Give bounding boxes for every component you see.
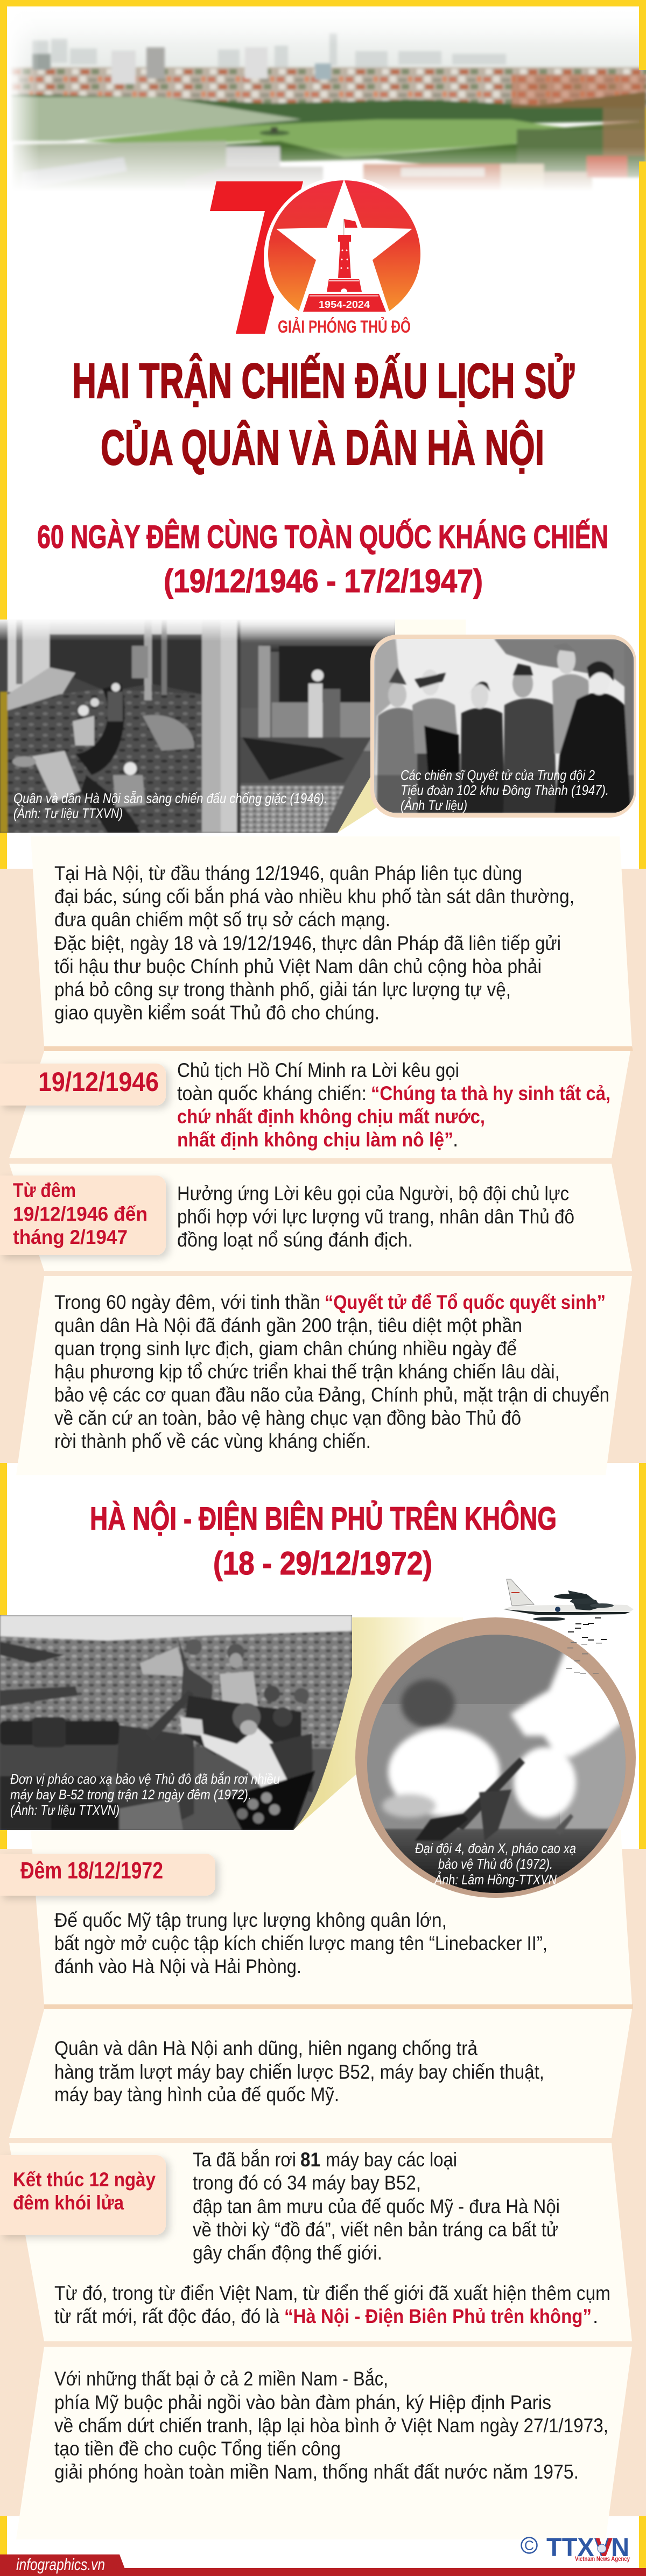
card: background of the battle: Tại Hà Nội, từ đầu tháng 12/1946, quân Pháp liên tục dùng <box>54 862 522 884</box>
label: from night 19/12/1946: 19/12/1946 đến <box>13 1203 148 1225</box>
card: background of the battle: đại bác, súng cối bắn phá vào nhiều khu phố tàn sát dân thường, <box>54 885 574 907</box>
card: response to the appeal <box>9 1164 632 1271</box>
label: end of 12 days and nights: Kết thúc 12 ngày <box>13 2169 156 2191</box>
card: background of the battle: đưa quân chiếm một số trụ sở cách mạng. <box>54 909 390 931</box>
footer: infographics.vn tag: infographics.vn <box>16 2555 105 2574</box>
logo star <box>276 179 412 311</box>
caption: portrait photo: Tiểu đoàn 102 khu Đông Thành (1947). <box>401 782 609 798</box>
card: resistance: hàng trăm lượt máy bay chiến lược B52, máy bay chiến thuật, <box>54 2061 544 2083</box>
section heading: Hanoi - Dien Bien Phu in the air <box>90 1501 557 1581</box>
card: end of 12 days: đập tan âm mưu của đế quốc Mỹ - đưa Hà Nội <box>193 2195 560 2218</box>
card: night of 18/12/1972: Đế quốc Mỹ tập trung lực lượng không quân lớn, <box>54 1909 447 1931</box>
label: 19/12/1946: 19/12/1946 <box>38 1067 159 1097</box>
caption: round photo: Đại đội 4, đoàn X, pháo cao xạ <box>415 1840 576 1856</box>
label: end of 12 days and nights: đêm khói lửa <box>13 2192 124 2214</box>
label: night of 18/12/1972: Đêm 18/12/1972 <box>20 1857 163 1884</box>
card: end of 12 days: từ rất mới, rất độc đáo, đó là <box>54 2305 279 2327</box>
card: Paris agreement <box>16 2347 632 2539</box>
card: resistance <box>9 2009 632 2138</box>
card: 60 days summary: quân dân Hà Nội đã đánh gần 200 trận, tiêu diệt một phần <box>54 1314 522 1336</box>
card: background of the battle: phá bỏ công sự trong thành phố, giải tán lực lượng tự vệ, <box>54 979 511 1001</box>
card: 19/12/1946 appeal: Chủ tịch Hồ Chí Minh ra Lời kêu gọi <box>177 1059 459 1081</box>
card: end of 12 days: trong đó có 34 máy bay B52, <box>193 2172 421 2194</box>
caption: portrait photo <box>401 767 609 813</box>
card: 60 days summary: về căn cứ an toàn, bảo vệ hàng chục vạn đồng bào Thủ đô <box>54 1407 521 1429</box>
card: resistance: Quân và dân Hà Nội anh dũng, hiên ngang chống trả <box>54 2037 478 2059</box>
card: 19/12/1946 appeal: “Chúng ta thà hy sinh tất cả, <box>371 1082 610 1104</box>
card: end of 12 days: máy bay các loại <box>326 2149 457 2171</box>
logo circle <box>268 180 420 311</box>
card: end of 12 days: gây chấn động thế giới. <box>193 2242 382 2264</box>
logo: 70 years liberation of the capital <box>210 177 425 338</box>
card: Paris agreement: tạo tiền đề cho cuộc Tổng tiến công <box>54 2438 341 2460</box>
caption: anti-aircraft photo: Đơn vị pháo cao xạ bảo vệ Thủ đô đã bắn rơi nhiều <box>10 1771 280 1787</box>
pale yellow accent behind 1972 photos <box>293 1617 463 1830</box>
section heading: 60 days and nights: (19/12/1946 - 17/2/1947) <box>164 563 483 599</box>
main title <box>72 353 574 475</box>
card: Paris agreement: giải phóng hoàn toàn miền Nam, thống nhất đất nước năm 1975. <box>54 2461 579 2483</box>
caption: portrait photo: (Ảnh Tư liệu) <box>401 797 467 813</box>
caption: round photo: Ảnh: Lâm Hồng-TTXVN <box>433 1871 557 1888</box>
caption: anti-aircraft photo: máy bay B-52 trong trận 12 ngày đêm (1972). <box>10 1786 251 1803</box>
logo caption: GIẢI PHÓNG THỦ ĐÔ <box>278 317 411 336</box>
card: Paris agreement: Với những thất bại ở cả 2 miền Nam - Bắc, <box>54 2368 388 2390</box>
card: end of 12 days <box>9 2143 632 2341</box>
caption: photo 1946 <box>13 790 327 821</box>
footer: TTXVN logo: TTXVN <box>546 2533 629 2562</box>
section heading: Hanoi - Dien Bien Phu in the air: (18 - 29/12/1972) <box>213 1545 432 1581</box>
card: 19/12/1946 appeal: nhất định không chịu làm nô lệ” <box>177 1129 453 1151</box>
photo: digging trenches 1946 <box>0 620 395 833</box>
card: background of the battle: Đặc biệt, ngày 18 và 19/12/1946, thực dân Pháp đã liên tiếp gửi <box>54 932 561 954</box>
card: 60 days summary: rời thành phố về các vùng kháng chiến. <box>54 1430 371 1452</box>
card: night of 18/12/1972: đánh vào Hà Nội và Hải Phòng. <box>54 1955 301 1977</box>
round photo: artillery firing <box>355 1617 636 1898</box>
caption: portrait photo: Các chiến sĩ Quyết tử của Trung đội 2 <box>401 767 595 783</box>
footer: TTXVN logo: Vietnam News Agency <box>575 2556 630 2563</box>
section heading: 60 days and nights <box>37 519 608 599</box>
footer: TTXVN logo: V <box>595 2533 613 2562</box>
peach background band 2 <box>0 1849 646 2516</box>
label: night of 18/12/1972 <box>0 1854 215 1896</box>
logo numeral 7 <box>210 181 303 334</box>
card: end of 12 days: “Hà Nội - Điện Biên Phủ trên không” <box>284 2305 592 2327</box>
label: from night 19/12/1946 <box>0 1176 166 1255</box>
logo years: 1954-2024 <box>319 299 370 310</box>
caption: photo 1946: (Ảnh: Tư liệu TTXVN) <box>13 805 123 821</box>
card: end of 12 days: 81 <box>300 2149 320 2171</box>
card: end of 12 days: Ta đã bắn rơi <box>193 2149 296 2171</box>
icon: B-52 bomber dropping bombs <box>503 1579 634 1674</box>
card: night of 18/12/1972: bất ngờ mở cuộc tập kích chiến lược mang tên “Linebacker II”, <box>54 1932 547 1954</box>
card: 60 days summary: “Quyết tử để Tổ quốc quyết sinh” <box>325 1291 606 1313</box>
card: resistance: máy bay tàng hình của đế quốc Mỹ. <box>54 2084 339 2106</box>
logo flag tower <box>303 219 386 312</box>
card: response to the appeal: phối hợp với lực lượng vũ trang, nhân dân Thủ đô <box>177 1206 574 1228</box>
card: 60 days summary: quan trọng sinh lực địch, giam chân chúng nhiều ngày để <box>54 1338 517 1360</box>
label: end of 12 days and nights <box>0 2155 166 2235</box>
card: 19/12/1946 appeal: chứ nhất định không chịu mất nước, <box>177 1106 485 1128</box>
card: 19/12/1946 appeal: . <box>453 1129 458 1151</box>
card: response to the appeal: Hưởng ứng Lời kêu gọi của Người, bộ đội chủ lực <box>177 1183 569 1205</box>
card: background of the battle: tối hậu thư buộc Chính phủ Việt Nam dân chủ cộng hòa phải <box>54 955 542 977</box>
pale yellow accent behind photos <box>338 770 377 833</box>
city panorama photo <box>11 31 646 189</box>
photo: soldiers group portrait <box>370 635 636 818</box>
caption: anti-aircraft photo <box>10 1771 280 1818</box>
card: night of 18/12/1972 <box>31 1774 633 2009</box>
card: end of 12 days: . <box>593 2305 598 2327</box>
card: end of 12 days: về thời kỳ “đồ đá”, viết nên bản tráng ca bất tử <box>193 2219 558 2241</box>
label: from night 19/12/1946: tháng 2/1947 <box>13 1226 128 1248</box>
card: response to the appeal: đồng loạt nổ súng đánh địch. <box>177 1229 413 1251</box>
card: 19/12/1946 appeal <box>9 1051 630 1158</box>
caption: round photo: bảo vệ Thủ đô (1972). <box>438 1856 553 1872</box>
card: 60 days summary <box>16 1276 632 1475</box>
footer: TTXVN logo: C <box>524 2538 534 2553</box>
card: 60 days summary: hậu phương kịp tổ chức triển khai thế trận kháng chiến lâu dài, <box>54 1361 560 1383</box>
peach background band 1 <box>0 869 646 1463</box>
card: 19/12/1946 appeal: toàn quốc kháng chiến: <box>177 1082 367 1104</box>
label: 19/12/1946 <box>0 1064 166 1106</box>
footer: red bar <box>0 2568 646 2576</box>
caption: round photo <box>415 1840 576 1888</box>
card: 60 days summary: Trong 60 ngày đêm, với tinh thần <box>54 1291 320 1313</box>
card: background of the battle <box>31 836 633 1051</box>
caption: anti-aircraft photo: (Ảnh: Tư liệu TTXVN) <box>10 1801 120 1818</box>
label: from night 19/12/1946: Từ đêm <box>13 1179 76 1201</box>
photo: anti-aircraft gun crew 1972 <box>0 1615 352 1830</box>
card: Paris agreement: phía Mỹ buộc phải ngồi vào bàn đàm phán, ký Hiệp định Paris <box>54 2391 551 2413</box>
caption: photo 1946: Quân và dân Hà Nội sẵn sàng chiến đấu chống giặc (1946). <box>13 790 327 806</box>
card: background of the battle: giao quyền kiểm soát Thủ đô cho chúng. <box>54 1002 380 1024</box>
pale cream accent above portrait <box>395 620 466 636</box>
